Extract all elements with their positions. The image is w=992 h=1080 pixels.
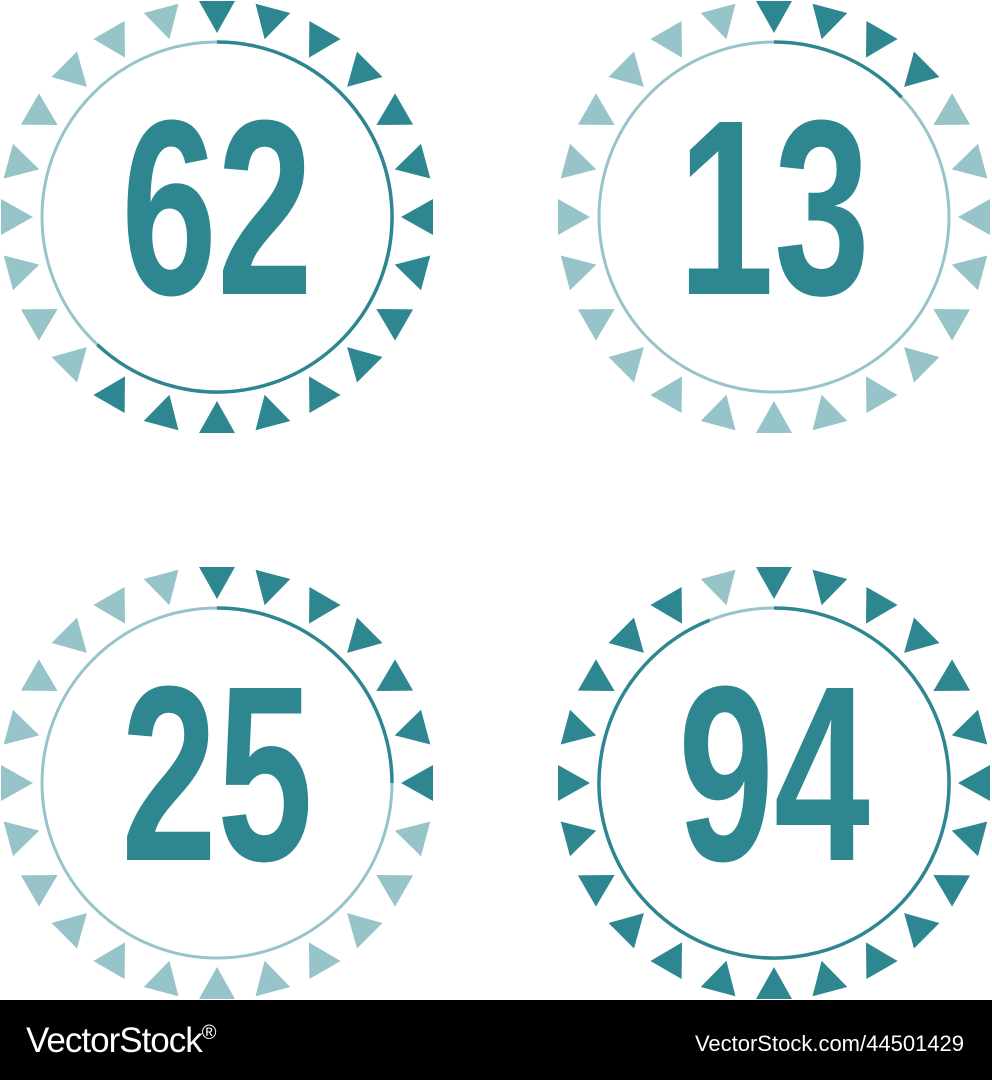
gauge: 94: 94 — [678, 634, 870, 914]
gauge: 94 — [558, 567, 990, 999]
gauge: 25 — [1, 567, 433, 999]
footer bar: VectorStock.com/44501429 — [695, 1031, 964, 1056]
gauge: 62: 62 — [121, 68, 313, 348]
gauge: 25: 25 — [121, 634, 313, 914]
gauge: 62 — [1, 1, 433, 433]
footer bar: VectorStock — [26, 1021, 202, 1060]
gauge: 13: 13 — [678, 68, 870, 348]
footer bar — [0, 1000, 992, 1080]
gauge: 13 — [558, 1, 990, 433]
footer bar: ® — [202, 1022, 217, 1044]
